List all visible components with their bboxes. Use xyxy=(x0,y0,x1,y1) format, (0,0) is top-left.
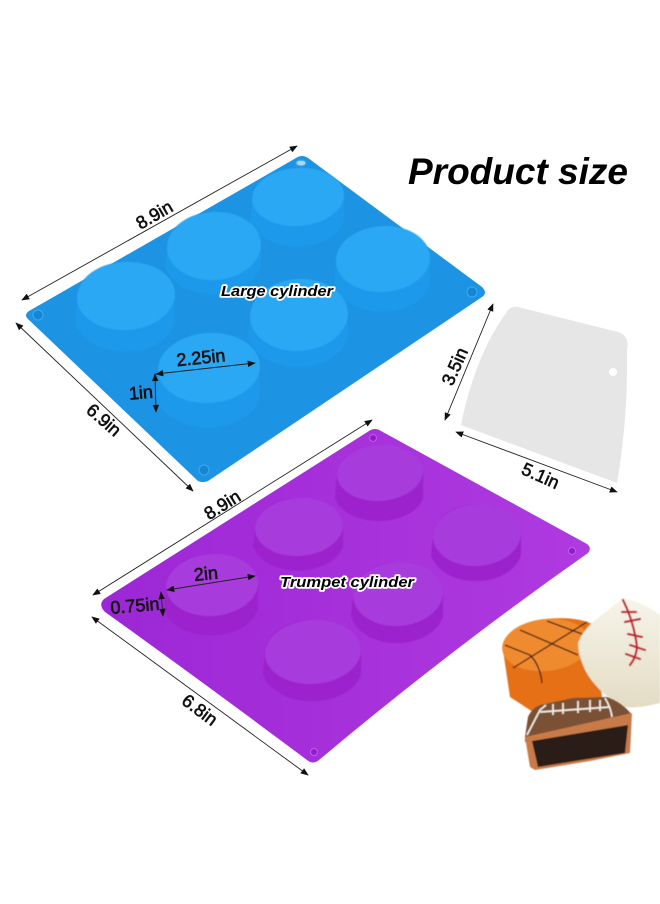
blue cavity centre xyxy=(248,276,350,368)
football treat xyxy=(525,697,632,770)
dimension: blue depth xyxy=(16,323,193,491)
blue tray corner holes xyxy=(33,160,477,475)
height arrow: 0.75in xyxy=(110,594,160,618)
purple cavity top middle xyxy=(253,495,345,571)
panel: scraper xyxy=(438,304,628,493)
purple cavity front xyxy=(263,617,363,701)
basketball treat xyxy=(500,615,602,712)
blue cavity measured xyxy=(156,330,262,428)
diameter arrow: 2.25in xyxy=(175,345,226,370)
panel: large cylinder blue mold xyxy=(26,156,485,482)
label: large cylinder: Large cylinder xyxy=(221,283,334,300)
baseball treat xyxy=(578,598,660,707)
scraper width dimension: 5.1in xyxy=(519,459,562,493)
dimension: purple depth xyxy=(92,617,308,775)
diameter arrow xyxy=(167,563,255,590)
diameter arrow: 2in xyxy=(193,563,219,585)
label: trumpet cylinder: Trumpet cylinder xyxy=(280,574,415,591)
dimension: purple depth: 6.8in xyxy=(178,690,221,730)
scraper hole xyxy=(609,368,617,376)
purple cavity centre xyxy=(351,559,445,643)
dimension: blue depth: 6.9in xyxy=(83,400,125,440)
scraper shape xyxy=(461,307,628,483)
height arrow: 1in xyxy=(128,382,154,404)
food photo: sports themed treats xyxy=(500,598,660,770)
blue cavity top middle xyxy=(165,209,263,295)
blue cavity right xyxy=(334,223,432,312)
purple cavity top back xyxy=(335,442,425,521)
purple cavity measured xyxy=(164,551,260,635)
title: Product size xyxy=(408,151,628,192)
dimension: blue width xyxy=(22,146,297,300)
purple cavity right xyxy=(431,501,523,581)
purple tray xyxy=(101,429,590,762)
dimension: purple width xyxy=(93,420,372,595)
scraper height dimension xyxy=(438,304,493,420)
diameter arrow xyxy=(156,345,255,374)
scraper width dimension xyxy=(456,432,617,493)
blue cavity top back xyxy=(250,165,346,247)
height arrow xyxy=(128,374,156,412)
blue cavity left xyxy=(75,259,177,352)
panel: trumpet cylinder purple mold xyxy=(101,429,590,762)
blue tray xyxy=(26,156,485,482)
dimension: blue width: 8.9in xyxy=(132,196,176,233)
scraper height dimension: 3.5in xyxy=(438,345,472,388)
purple tray corner holes xyxy=(310,434,576,756)
dimension: purple width: 8.9in xyxy=(200,486,244,524)
